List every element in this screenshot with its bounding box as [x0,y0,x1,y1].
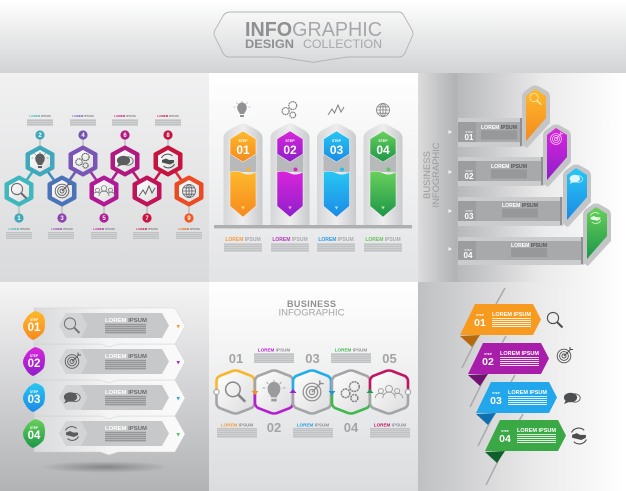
capsule icons [234,101,390,118]
step number badges: 1 [17,216,21,222]
bar 01 [23,308,185,347]
capsule 03: 03 [330,143,343,157]
panel: ribbon arrows [418,282,626,491]
tag 04 [583,204,611,266]
ribbon 02: 02 [482,356,494,368]
top captions: LOREM IPSUM [29,114,51,118]
title badge [214,12,413,62]
step number badges [14,130,194,223]
bar 01 [458,118,523,147]
captions: LOREM IPSUM [258,348,290,352]
capsule captions: LOREM IPSUM [365,237,401,243]
bar 04: LOREM IPSUM [511,243,547,249]
capsule 04 [364,124,402,225]
capsule captions: LOREM IPSUM [272,237,308,243]
bar 02: LOREM IPSUM [105,354,147,360]
hex 2 bulb [27,147,53,175]
vertical title [422,142,442,208]
capsule captions: LOREM IPSUM [225,237,261,243]
process hexagon 2 [252,370,293,414]
captions: LOREM IPSUM [374,422,406,428]
top captions: LOREM IPSUM [157,114,179,118]
tag 02 [543,124,571,187]
bar 01: 01 [465,133,474,142]
hex 7 zigzag [134,177,160,205]
title badge: INFOGRAPHIC [245,19,382,41]
hex 6 chat [112,147,138,175]
hex 9 globe [176,177,202,205]
step numbers: 01 [229,351,243,366]
process hexagon 3 [290,370,331,414]
bar 01: LOREM IPSUM [105,318,147,324]
ribbon 03 [476,382,557,425]
panel title: INFOGRAPHIC [278,308,345,318]
bar 03: LOREM IPSUM [105,390,147,396]
ribbon 01 [460,304,541,347]
hex 4 gears [70,147,96,175]
header band [0,0,626,73]
step number badges: 2 [38,133,42,139]
bar 03: STEP [30,390,39,394]
bar 01: STEP [30,318,39,322]
process hexagon 1 [214,370,254,414]
capsule 02: STEP [285,139,295,143]
ribbon 02: LOREM IPSUM [500,351,539,357]
step number badges: 7 [145,216,149,222]
shadow [40,461,170,473]
title badge: DESIGN [245,37,294,51]
ribbon 02 [468,343,549,386]
panel: linked hexagon process [209,282,418,491]
bottom captions: LOREM IPSUM [136,227,158,231]
capsule 04: STEP [378,139,388,143]
ribbon 04: LOREM IPSUM [517,428,556,434]
bar 02: LOREM IPSUM [491,164,527,170]
ribbon 03: STEP [492,391,500,395]
capsule 01: STEP [238,139,248,143]
ribbon 04: STEP [501,429,509,433]
capsule 01 [224,124,262,225]
panel title [278,299,345,318]
ribbon 01: 01 [474,317,486,329]
ribbon 03: LOREM IPSUM [508,390,547,396]
top captions: LOREM IPSUM [114,114,136,118]
base shelf [214,225,412,228]
panel title: BUSINESS [287,299,336,309]
step numbers: 03 [305,351,320,366]
capsule 02 [270,124,310,225]
captions [217,348,410,438]
step numbers: 05 [382,351,397,366]
bottom captions: LOREM IPSUM [178,227,200,231]
step numbers [229,351,397,435]
capsule 04: 04 [376,143,390,157]
bar 02: STEP [30,354,39,358]
hex 3 target [49,177,75,205]
bar 03: STEP [465,209,473,213]
bar 03: 03 [28,394,40,406]
bar 04 [23,416,185,455]
process hexagon 4 [328,370,370,414]
capsule 03: STEP [332,139,342,143]
panel: staircase bars [418,73,626,282]
step number badges: 9 [187,216,191,222]
bottom captions [6,227,202,239]
top captions [27,114,181,126]
ribbon icons [547,312,586,444]
capsule 01: 01 [236,143,250,157]
capsule captions [224,237,402,252]
strip arrows [448,130,452,251]
vertical title: BUSINESS [422,151,433,199]
bar 04 [458,237,584,265]
capsule captions: LOREM IPSUM [318,237,354,243]
captions: LOREM IPSUM [335,348,367,352]
step numbers: 04 [344,420,359,435]
process hexagon 5 [366,370,411,414]
tag 03 [563,164,591,227]
bar 03: 03 [465,212,474,221]
bar 04: LOREM IPSUM [105,426,147,432]
step numbers: 02 [267,420,281,435]
bar 02: 02 [28,358,40,370]
bar 04: 04 [28,430,41,442]
captions: LOREM IPSUM [221,422,253,428]
ribbon 04: 04 [499,433,511,445]
bar 04: STEP [30,426,39,430]
panel: step capsules [209,73,418,282]
bar 04: STEP [464,248,472,252]
bar 02 [458,157,544,186]
ribbon 03: 03 [490,395,502,407]
step number badges: 8 [166,133,170,139]
bottom captions: LOREM IPSUM [51,227,73,231]
vertical title: INFOGRAPHIC [431,142,442,208]
bar 02: STEP [465,169,473,173]
step number badges: 3 [60,216,64,222]
bar 03: LOREM IPSUM [502,203,538,209]
ribbon 04 [485,420,566,463]
bar 01: 01 [28,322,41,334]
panel: stacked step bars [0,282,209,491]
title badge: COLLECTION [303,37,382,51]
hex 8 handshake [155,147,181,175]
tag 01 [522,86,550,148]
hex 1 magnifier [6,177,32,205]
bottom captions: LOREM IPSUM [8,227,30,231]
bar 01: STEP [465,130,473,134]
slash shadows [462,288,523,485]
hexagon chain connectors [19,135,189,218]
capsule 02: 02 [283,143,297,157]
capsule 03 [317,124,356,225]
bar 02: 02 [465,172,474,181]
ribbon 02: STEP [484,352,492,356]
captions: LOREM IPSUM [297,422,329,428]
step number badges: 6 [123,133,127,139]
ribbon 01: STEP [476,313,484,317]
panel: hexagon timeline [0,73,209,282]
bar 03 [458,197,563,226]
bottom captions: LOREM IPSUM [93,227,115,231]
top captions: LOREM IPSUM [72,114,94,118]
bar 01: LOREM IPSUM [481,125,517,131]
step number badges: 5 [102,216,106,222]
side strip [418,73,457,282]
ribbon 01: LOREM IPSUM [492,312,531,318]
bar 03 [23,380,185,419]
bar 04: 04 [464,251,473,260]
hex 5 people [91,177,117,205]
step number badges: 4 [81,133,85,139]
bar 02 [23,344,185,383]
